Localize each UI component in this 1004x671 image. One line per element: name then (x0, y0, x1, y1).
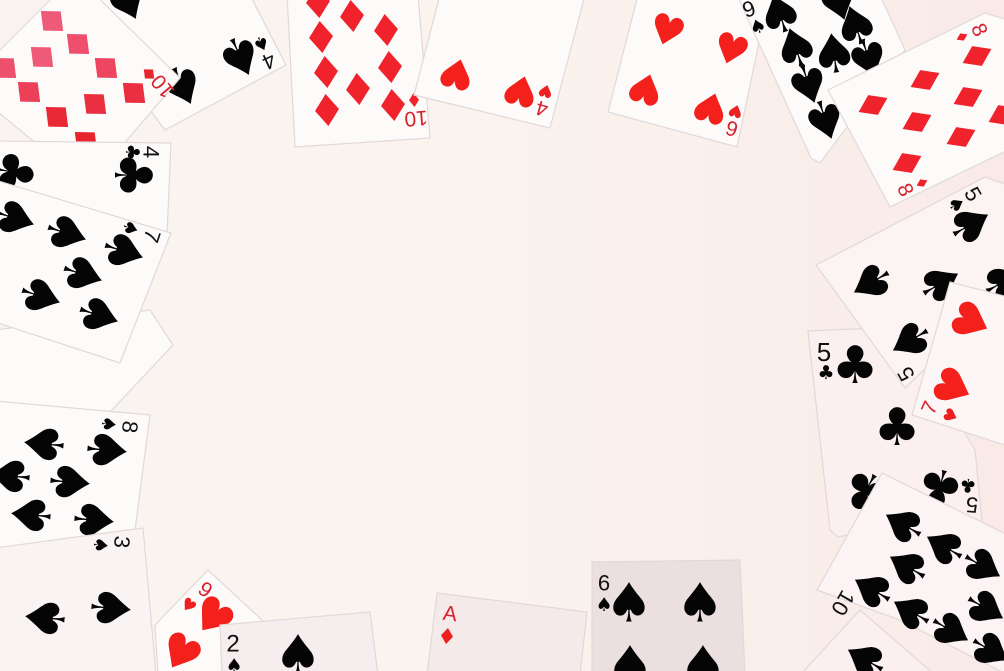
card: seven of hearts, right (912, 282, 1004, 446)
card: ten of spades, bottom right: ♠ (911, 593, 989, 667)
card: five of spades, right: ♠ (942, 192, 970, 218)
card: ten of spades, bottom right (817, 473, 1004, 671)
card: nine of spades, top right: ♠ (775, 46, 841, 120)
card: four of hearts, top centre: ♥ (497, 62, 545, 118)
card: eight of spades, left: ♠ (36, 455, 102, 509)
card: five of spades, right: 5 (892, 362, 920, 386)
card: three of spades, bottom left (0, 528, 156, 671)
card: seven of spades, left: ♠ (45, 241, 119, 307)
card: eight of spades, left: 8 (117, 420, 143, 434)
card: nine of spades, top right: ♠ (835, 20, 901, 94)
card: eight of spades, left: ♠ (73, 423, 139, 477)
card: nine of spades, top right: ♠ (763, 11, 829, 85)
card: four of clubs, left (0, 141, 171, 235)
card: nine of hearts, bottom left: ♥ (176, 593, 200, 619)
card: seven of spades, left: ♠ (86, 218, 160, 284)
card: eight of diamonds, top right: 8 (892, 180, 918, 200)
card: four of spades, top left: ♠ (205, 17, 275, 95)
card: nine of hearts, bottom left: ♥ (178, 583, 246, 653)
card: six of hearts, top right: ♥ (621, 60, 671, 116)
card: five of spades, right: ♠ (833, 245, 911, 319)
card: blank lower card, left (0, 310, 173, 412)
card: nine of spades, top right (737, 0, 905, 163)
card: six of hearts, top right: ♥ (642, 2, 692, 60)
card: four of spades, top left: ♠ (147, 46, 217, 124)
card: six of spades, bottom (592, 560, 745, 671)
card: nine of spades, top right: ♠ (806, 19, 862, 89)
card: six of spades, bottom: ♠ (605, 572, 653, 634)
card: ten of spades, bottom right: ♠ (906, 510, 984, 584)
card: three of spades, bottom left: ♠ (77, 581, 143, 635)
card: eight of diamonds, top right (828, 13, 1004, 207)
card: five of clubs, right: ♣ (910, 452, 970, 522)
card: seven of spades, left: ♠ (3, 263, 77, 329)
card: four of hearts, top centre (414, 0, 585, 128)
card: four of spades, top left: ♠ (249, 29, 273, 57)
card: three of spades, bottom left: 3 (109, 535, 135, 549)
card: two of spades, bottom (220, 612, 378, 671)
card: eight of spades, left (0, 401, 150, 555)
card: five of clubs, right: 5 (817, 337, 831, 367)
card: four of hearts, top centre: ♥ (536, 78, 556, 102)
card: six of spades, bottom: ♠ (676, 572, 724, 634)
card: seven of spades, left: ♠ (61, 282, 135, 348)
card: six of spades, bottom: ♠ (595, 594, 613, 616)
card: ace of diamonds, bottom: A (442, 602, 458, 626)
card: six of hearts, top right (608, 0, 768, 147)
card: ten of diamonds, top left (0, 0, 180, 186)
card: five of clubs, right (808, 327, 982, 537)
card: seven of spades, left: ♠ (117, 216, 143, 240)
card: five of clubs, right: ♣ (817, 362, 835, 384)
card: nine of spades, top right: ♠ (792, 82, 858, 156)
card: four of clubs, left: ♣ (121, 143, 143, 161)
card: three of spades, bottom left: ♠ (13, 591, 79, 645)
card: eight of diamonds, top right: 8 (966, 20, 992, 40)
card: five of clubs, right: ♣ (959, 473, 977, 497)
card: five of spades, right: ♠ (901, 247, 979, 321)
card: partial spade card, bottom right corner (800, 610, 935, 671)
card: nine of hearts, bottom left: 9 (194, 577, 216, 603)
card: eight of spades, left: ♠ (60, 493, 126, 547)
card: ten of diamonds, top centre: 10 (403, 106, 429, 130)
card: three of spades, bottom left: ♠ (88, 536, 112, 554)
card: two of spades, bottom: 2 (226, 630, 240, 658)
card: five of clubs, right: ♣ (831, 452, 901, 528)
card: four of clubs, left: ♣ (102, 152, 162, 198)
card: eight of spades, left: ♠ (12, 417, 78, 471)
card: ten of spades, bottom right: ♠ (869, 530, 947, 604)
card: seven of spades, left (0, 180, 171, 363)
card: seven of hearts, right: 7 (917, 398, 943, 418)
card: five of spades, right: 5 (959, 182, 987, 206)
card: six of hearts, top right: 6 (723, 115, 741, 141)
card: ten of spades, bottom right: 10 (826, 586, 860, 620)
card: five of spades, right (816, 177, 1004, 388)
card: six of hearts, top right: ♥ (706, 21, 756, 79)
card: five of clubs, right: ♣ (832, 336, 878, 396)
card: eight of spades, left: ♠ (96, 415, 120, 433)
card: four of spades, top left (85, 0, 286, 130)
card: seven of hearts, right: ♥ (940, 405, 964, 427)
card: nine of hearts, bottom left (148, 570, 262, 671)
card: six of spades, bottom: 6 (598, 570, 610, 596)
card: four of hearts, top centre: 4 (533, 95, 551, 121)
card: four of clubs, left: 4 (138, 146, 164, 158)
card: five of spades, right: ♠ (872, 303, 950, 377)
card: seven of hearts, right: ♥ (921, 357, 989, 419)
card: ten of spades, bottom right: ♠ (834, 553, 912, 627)
card: ten of diamonds, top left: 10 (147, 70, 179, 102)
card: ten of spades, bottom right: ♠ (865, 488, 943, 562)
card: ace of diamonds, bottom (427, 593, 587, 671)
card: five of clubs, right: 5 (965, 492, 979, 518)
card: seven of spades, left: 7 (138, 226, 166, 246)
card: six of hearts, top right: ♥ (726, 98, 746, 122)
card: seven of spades, left: ♠ (29, 200, 103, 266)
card: five of clubs, right: ♣ (874, 398, 920, 458)
card: four of spades, top left: 4 (258, 47, 280, 75)
card: eight of spades, left: ♠ (0, 488, 65, 542)
card: six of hearts, top right: ♥ (686, 79, 736, 135)
card: nine of spades, top right: ♠ (746, 14, 770, 40)
card: ten of diamonds, top centre (287, 0, 430, 147)
card: four of hearts, top centre: ♥ (433, 45, 481, 101)
card: ten of spades, bottom right: ♠ (873, 575, 951, 649)
